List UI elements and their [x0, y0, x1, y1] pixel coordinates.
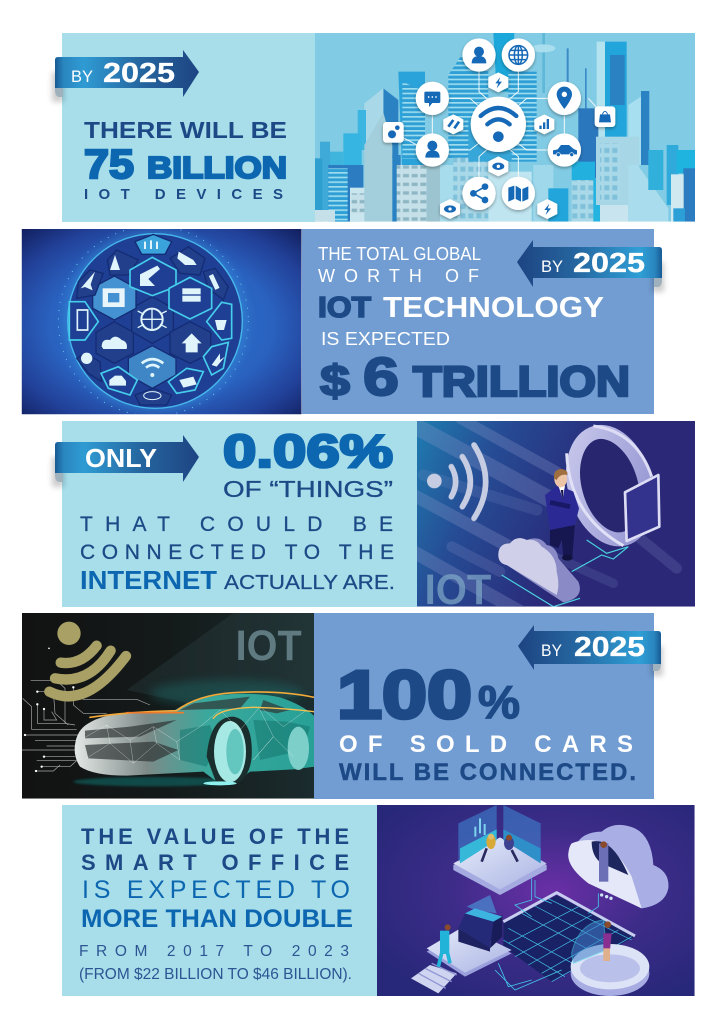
watermark: IOT: IOT: [425, 566, 491, 614]
panel 1 text background: [62, 33, 315, 222]
text: that could be connected to the: [80, 513, 394, 564]
text: more than double: MORE THAN DOUBLE: [81, 905, 353, 933]
illustration: man with smartwatch and cloud: [413, 418, 695, 614]
ribbon: by 2025: [52, 50, 199, 102]
light streaks: [90, 692, 314, 718]
icon: car: [548, 133, 581, 167]
text: the value of the smart office: [81, 824, 349, 875]
text: is expected: IS EXPECTED: [321, 328, 450, 349]
text: the total global worth of: WORTH OF: [318, 266, 479, 286]
text: is expected to: IS EXPECTED TO: [82, 876, 350, 904]
text: 100 percent: 100: [337, 657, 472, 733]
text: 75 billion: 75: [84, 141, 134, 187]
text: the total global worth of: [318, 243, 481, 286]
panel: 75 billion IoT devices: [52, 33, 695, 222]
text: that could be connected to the: THAT COULD BE: [80, 513, 393, 536]
IOT watermark: IOT: [236, 622, 302, 670]
text: 6 trillion: TRILLION: [413, 358, 630, 406]
car body: [75, 694, 315, 784]
text: iot technology: IOT: [318, 292, 371, 324]
text: iot technology: TECHNOLOGY: [383, 292, 604, 324]
ribbon: by 2025: BY: [71, 67, 93, 86]
illustration: isometric smart office: [377, 805, 695, 996]
platform: server and person on stairs: [411, 895, 512, 993]
ribbon: by 2025: 2025: [574, 631, 645, 662]
text: that could be connected to the: CONNECTED TO THE: [80, 541, 394, 564]
ribbon: by 2025: [518, 625, 663, 676]
ribbon: by 2025: [517, 240, 664, 292]
text: the value of the smart office: THE VALUE OF THE: [81, 824, 349, 849]
text: there will be: THERE WILL BE: [84, 117, 287, 143]
sphere icons: [77, 240, 227, 400]
text: iot devices: IOT DEVICES: [84, 186, 283, 203]
platform: analyst on round pedestal: [571, 920, 649, 996]
panel 5 text background: [62, 805, 377, 996]
icon: wifi signal: [427, 445, 486, 518]
illustration: businessman: [545, 469, 579, 561]
ribbon: by 2025: 2025: [103, 57, 175, 88]
platform: meeting room: [453, 805, 547, 895]
icon: user: [462, 38, 496, 72]
text: from 22 billion to 46 billion: (FROM $22 BILLION TO $46 BILLION).: [79, 966, 352, 983]
panel 3 text background: [62, 421, 417, 607]
text: 100 percent: [337, 657, 520, 733]
panel: smart office value: [62, 805, 695, 996]
icon: chat bubble: [416, 82, 449, 115]
platform: cloud: [568, 825, 668, 908]
text: the value of the smart office: SMART OFFICE: [81, 850, 349, 875]
hexagon outlines: [69, 257, 232, 395]
ribbon: only: ONLY: [85, 443, 157, 473]
ribbon: only: [52, 435, 199, 487]
text: 100 percent: %: [478, 676, 520, 728]
text: of sold cars: OF SOLD CARS: [339, 731, 633, 758]
icon: wifi hub: [471, 97, 526, 152]
icon: location pin: [548, 82, 581, 115]
circuit lines: [22, 681, 150, 771]
text: 75 billion: [84, 141, 287, 187]
panel 2 text background: [302, 229, 654, 414]
panel: only 0.06 percent connected: [52, 418, 695, 614]
panel: 6 trillion technology worth: [22, 226, 664, 416]
text: of things: OF “THINGS”: [223, 476, 393, 502]
icon: user: [416, 133, 449, 167]
text: from 2017 to 2023: FROM 2017 TO 2023: [79, 943, 349, 960]
illustration: cloud: [498, 538, 580, 602]
text: internet: INTERNET: [80, 565, 217, 595]
icon: wifi signal olive: [49, 622, 126, 696]
icon: map: [502, 177, 535, 210]
ribbon: by 2025: 2025: [573, 247, 645, 278]
hexagon cells: [77, 234, 228, 405]
text: 6 trillion: $: [320, 357, 350, 406]
text: will be connected: WILL BE CONNECTED.: [339, 759, 636, 786]
panel 4 text background: [314, 613, 654, 799]
ribbon: by 2025: BY: [541, 257, 563, 276]
panel: connected cars: [22, 613, 663, 799]
text: 6 trillion: [320, 347, 630, 407]
text: actually are: ACTUALLY ARE.: [224, 572, 395, 594]
icon: globe: [502, 38, 535, 72]
illustration: smartwatch: [502, 423, 659, 607]
icon: share: [462, 177, 496, 210]
text: 0.06 percent: 0.06%: [223, 425, 393, 477]
ribbon: by 2025: BY: [541, 641, 562, 660]
network floor: [495, 878, 635, 990]
text: the total global worth of: THE TOTAL GLOBAL: [318, 243, 481, 264]
text: 6 trillion: 6: [363, 347, 399, 407]
illustration: hexagon sphere: [22, 226, 302, 416]
illustration: wireframe connected car: [22, 613, 315, 799]
icons: small hexagons and tiles: [383, 72, 615, 219]
illustration: smart city with connected icons: [315, 33, 695, 222]
text: 75 billion: BILLION: [147, 150, 287, 185]
